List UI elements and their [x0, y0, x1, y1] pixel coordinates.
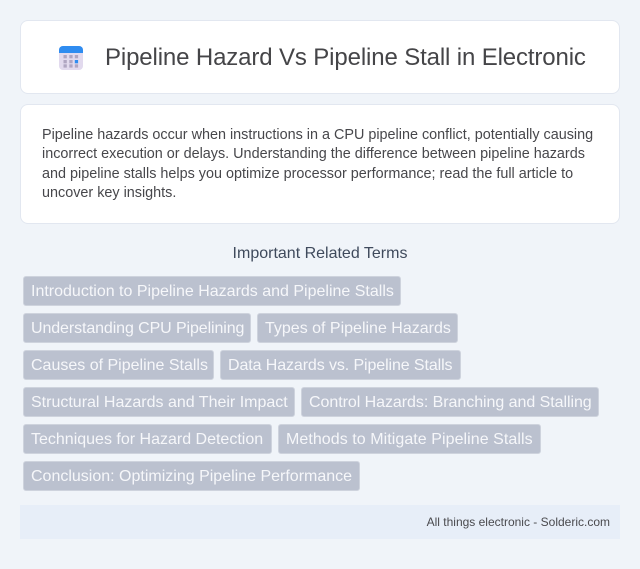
intro paragraph: [42, 126, 593, 201]
tag: [23, 424, 272, 454]
tag: Methods to Mitigate Pipeline Stalls: [286, 431, 533, 448]
tag: Understanding CPU Pipelining: [31, 320, 244, 337]
intro paragraph: Pipeline hazards occur when instructions in a CPU pipeline conflict, potentially causing: [42, 126, 593, 142]
tag: [23, 313, 251, 343]
heading: important related terms: Important Related Terms: [233, 245, 407, 262]
tag: Data Hazards vs. Pipeline Stalls: [228, 357, 452, 374]
tag: Conclusion: Optimizing Pipeline Performance: [31, 468, 352, 485]
panel: intro text card: [20, 104, 620, 224]
intro paragraph: and pipeline stalls helps you optimize processor performance; read the full article to: [42, 166, 573, 182]
tag: [301, 387, 599, 417]
tag: Techniques for Hazard Detection: [31, 431, 263, 448]
panel: related term tags: [23, 276, 599, 491]
intro paragraph: incorrect execution or delays. Understanding the difference between pipeline hazards: [42, 146, 585, 162]
footer credit: All things electronic - Solderic.com: [427, 515, 610, 529]
tag: [23, 350, 214, 380]
icon: calendar grid: [59, 46, 83, 70]
tag: [220, 350, 461, 380]
tag: [278, 424, 541, 454]
footer bar: [20, 505, 620, 539]
tag: [23, 461, 360, 491]
tag: Structural Hazards and Their Impact: [31, 394, 288, 411]
tag: [257, 313, 458, 343]
tag: [23, 387, 295, 417]
tag: Control Hazards: Branching and Stalling: [309, 394, 592, 411]
title: Pipeline Hazard Vs Pipeline Stall in Electronic: [105, 44, 586, 71]
tag: Types of Pipeline Hazards: [265, 320, 451, 337]
tag: Introduction to Pipeline Hazards and Pipeline Stalls: [31, 283, 394, 300]
tag: Causes of Pipeline Stalls: [31, 357, 208, 374]
intro paragraph: uncover key insights.: [42, 185, 176, 201]
panel: title card: [20, 20, 620, 94]
tag: [23, 276, 401, 306]
